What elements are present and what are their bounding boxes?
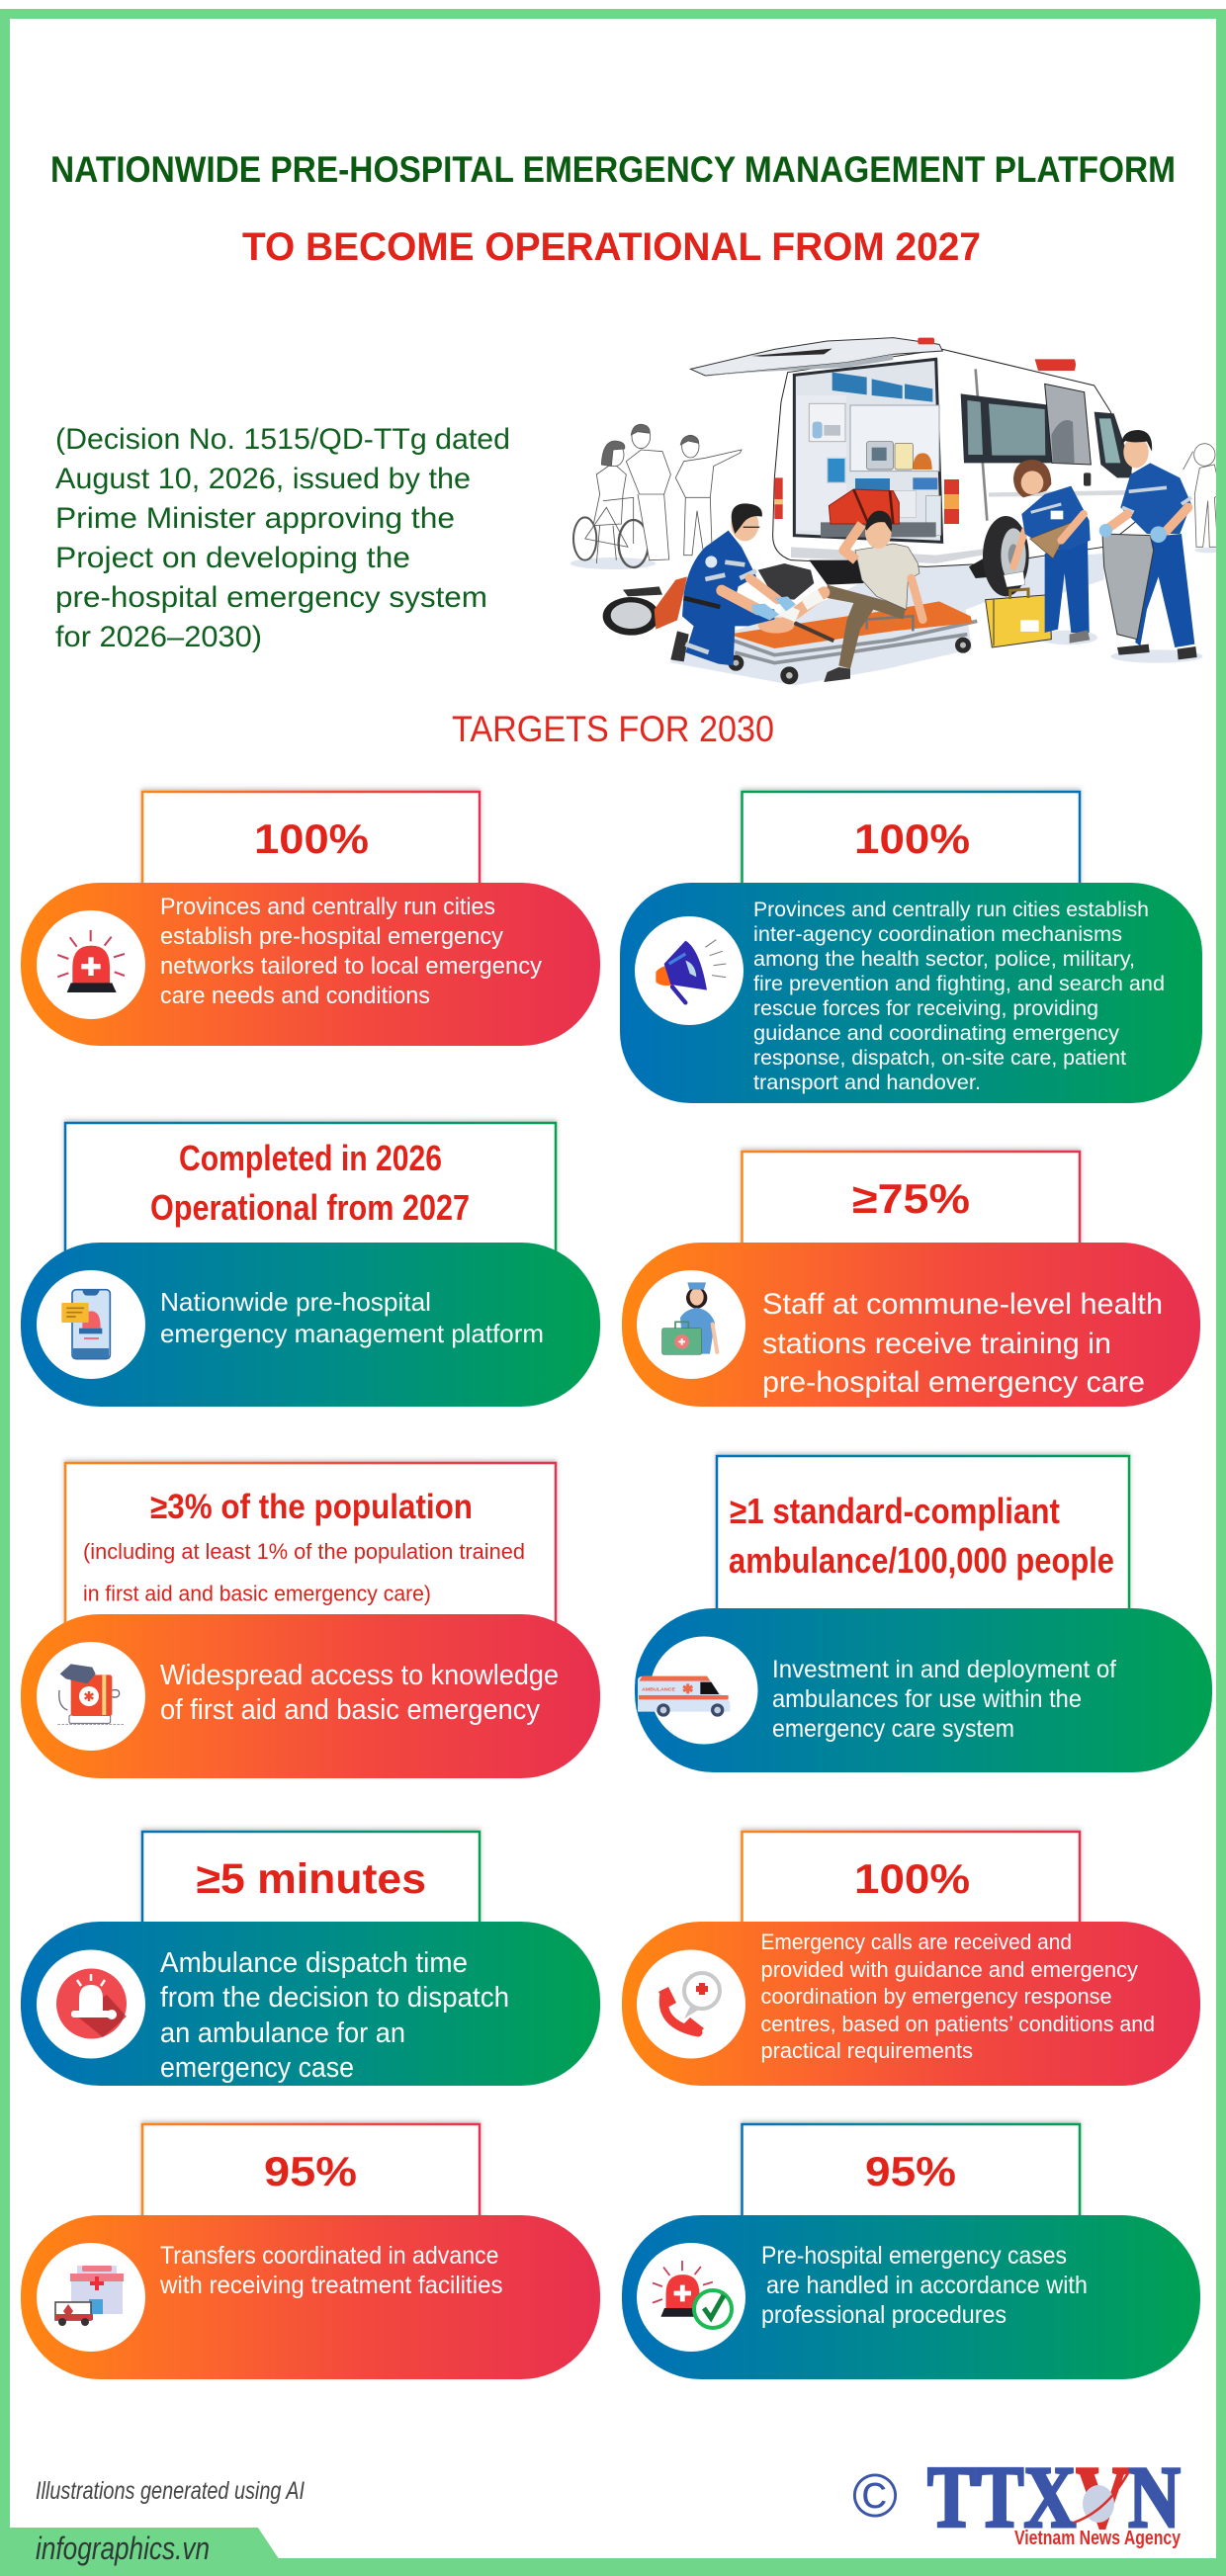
- card 8: emergency calls: coordination by emergency response: [761, 1984, 1111, 2009]
- motorbike: [603, 563, 814, 636]
- card 2: inter-agency coordination: [620, 792, 1202, 1103]
- yellow medical case: [986, 589, 1051, 647]
- title: [50, 149, 1176, 269]
- card 9: coordinated transfers: 95%: [264, 2148, 357, 2194]
- card 8: emergency calls: provided with guidance and emergency: [761, 1957, 1139, 1982]
- card 6: ambulance ratio: Investment in and deployment of: [772, 1656, 1116, 1683]
- ground shadow: [570, 548, 1221, 685]
- icon: ambulance: [638, 1676, 730, 1717]
- card 6: ambulance ratio: emergency care system: [772, 1715, 1014, 1743]
- decision text: Prime Minister approving the: [55, 502, 455, 535]
- card 8: emergency calls: Emergency calls are received and: [761, 1930, 1072, 1954]
- card 7: dispatch time: an ambulance for an: [160, 2018, 405, 2049]
- card 8: emergency calls: practical requirements: [761, 2038, 973, 2063]
- card 2: inter-agency coordination: transport and handover.: [753, 1072, 981, 1094]
- card 10: professional procedures: [622, 2124, 1200, 2379]
- frame repaint right edge: [1216, 336, 1226, 692]
- illustration: ambulance scene: [570, 338, 1221, 685]
- icon: alarm beacon: [56, 1969, 127, 2038]
- card 8: emergency calls: centres, based on patients’ conditions and: [761, 2012, 1155, 2036]
- icon: siren: [57, 930, 125, 992]
- card 9: coordinated transfers: with receiving treatment facilities: [159, 2272, 502, 2299]
- card 6: ambulance ratio: ambulance/100,000 people: [729, 1540, 1114, 1581]
- card 3: management platform: [21, 1123, 600, 1407]
- card 9: coordinated transfers: Transfers coordinated in advance: [160, 2242, 498, 2270]
- card 5: first aid knowledge: ≥3% of the population: [150, 1488, 473, 1526]
- logo: TTXVN: ©: [852, 2462, 898, 2531]
- icon: medical book: [57, 1664, 125, 1724]
- card 3: management platform: emergency management platform: [160, 1319, 544, 1348]
- card 2: inter-agency coordination: response, dispatch, on-site care, patient: [753, 1047, 1126, 1070]
- card 9: coordinated transfers: [21, 2124, 600, 2379]
- AI illustration note: Illustrations generated using AI: [36, 2477, 305, 2505]
- bystanders sketch: [573, 424, 742, 567]
- card 7: dispatch time: ≥5 minutes: [196, 1855, 426, 1903]
- card 1: provincial networks: 100%: [254, 816, 369, 862]
- footer tab: infographics.vn: [36, 2531, 210, 2566]
- card 1: provincial networks: Provinces and centrally run cities: [160, 894, 495, 920]
- card 6: ambulance ratio: [635, 1456, 1212, 1772]
- card 10: professional procedures: Pre-hospital emergency cases: [761, 2242, 1067, 2270]
- card 1: provincial networks: [21, 792, 600, 1046]
- card 5: first aid knowledge: Widespread access to knowledge: [160, 1660, 559, 1691]
- icon: hospital and ambulance: [55, 2266, 124, 2326]
- card 4: staff training: ≥75%: [852, 1175, 970, 1222]
- card 8: emergency calls: [622, 1832, 1200, 2086]
- logo: TTXVN: Vietnam News Agency: [1014, 2528, 1182, 2549]
- logo: TTXVN: TTXVN: [927, 2449, 1181, 2546]
- icon: phone and medical bubble: [658, 1973, 720, 2036]
- card 4: staff training: Staff at commune-level health: [762, 1288, 1163, 1321]
- card 7: dispatch time: Ambulance dispatch time: [160, 1947, 468, 1979]
- card 5: first aid knowledge: of first aid and basic emergency: [160, 1694, 540, 1726]
- section heading: TARGETS FOR 2030: [452, 709, 774, 749]
- card 2: inter-agency coordination: rescue forces for receiving, providing: [753, 997, 1098, 1020]
- card 7: dispatch time: [21, 1832, 600, 2086]
- female paramedic: [1013, 460, 1091, 644]
- card 8: emergency calls: 100%: [854, 1855, 970, 1902]
- card 4: staff training: pre-hospital emergency care: [762, 1366, 1145, 1399]
- card 4: staff training: stations receive training in: [762, 1328, 1111, 1360]
- stretcher: [725, 601, 977, 684]
- male paramedic with stretcher board: [1099, 430, 1197, 659]
- card 10: professional procedures: 95%: [865, 2148, 956, 2194]
- card 2: inter-agency coordination: fire prevention and fighting, and search and: [753, 973, 1165, 995]
- card 5: first aid knowledge: [21, 1463, 600, 1778]
- decision text: August 10, 2026, issued by the: [55, 463, 471, 495]
- icon: ambulance: AMBULANCE: [642, 1687, 676, 1693]
- card 2: inter-agency coordination: Provinces and centrally run cities establish: [753, 899, 1149, 921]
- decision text: pre-hospital emergency system: [55, 581, 487, 614]
- card 10: professional procedures: are handled in accordance with: [766, 2272, 1088, 2299]
- card 3: management platform: Operational from 2027: [150, 1187, 470, 1228]
- kneeling paramedic: [670, 503, 796, 665]
- card 1: provincial networks: care needs and conditions: [160, 983, 430, 1009]
- card 1: provincial networks: establish pre-hospital emergency: [160, 923, 503, 950]
- card 2: inter-agency coordination: among the health sector, police, military,: [753, 948, 1135, 971]
- icon: megaphone: [656, 940, 726, 1002]
- title: TO BECOME OPERATIONAL FROM 2027: [242, 225, 981, 269]
- card 6: ambulance ratio: ≥1 standard-compliant: [730, 1491, 1060, 1531]
- card 5: first aid knowledge: (including at least 1% of the population trained: [83, 1539, 525, 1564]
- decision text: [55, 423, 510, 653]
- card 1: provincial networks: networks tailored to local emergency: [160, 953, 542, 980]
- card 4: staff training: [622, 1152, 1200, 1407]
- decision text: Project on developing the: [55, 542, 410, 574]
- card 3: management platform: Nationwide pre-hospital: [160, 1287, 431, 1317]
- card 7: dispatch time: emergency case: [160, 2052, 354, 2084]
- card 2: inter-agency coordination: guidance and coordinating emergency: [753, 1022, 1120, 1045]
- decision text: for 2026–2030): [55, 621, 262, 653]
- card 7: dispatch time: from the decision to dispatch: [160, 1982, 509, 2014]
- far-right bystander sketch: [1183, 444, 1221, 547]
- card 2: inter-agency coordination: 100%: [854, 816, 970, 862]
- ambulance body: [690, 338, 1137, 596]
- injured man: [758, 511, 922, 682]
- card 6: ambulance ratio: ambulances for use within the: [772, 1685, 1082, 1713]
- icon: smartphone alert: [61, 1290, 110, 1359]
- decision text: (Decision No. 1515/QD-TTg dated: [55, 423, 510, 456]
- card 10: professional procedures: professional procedures: [761, 2301, 1007, 2329]
- card 3: management platform: Completed in 2026: [179, 1138, 442, 1178]
- card 5: first aid knowledge: in first aid and basic emergency care): [83, 1582, 431, 1605]
- icon: siren with check: [653, 2261, 732, 2328]
- card 2: inter-agency coordination: inter-agency coordination mechanisms: [753, 923, 1122, 946]
- icon: nurse with kit: [662, 1282, 717, 1354]
